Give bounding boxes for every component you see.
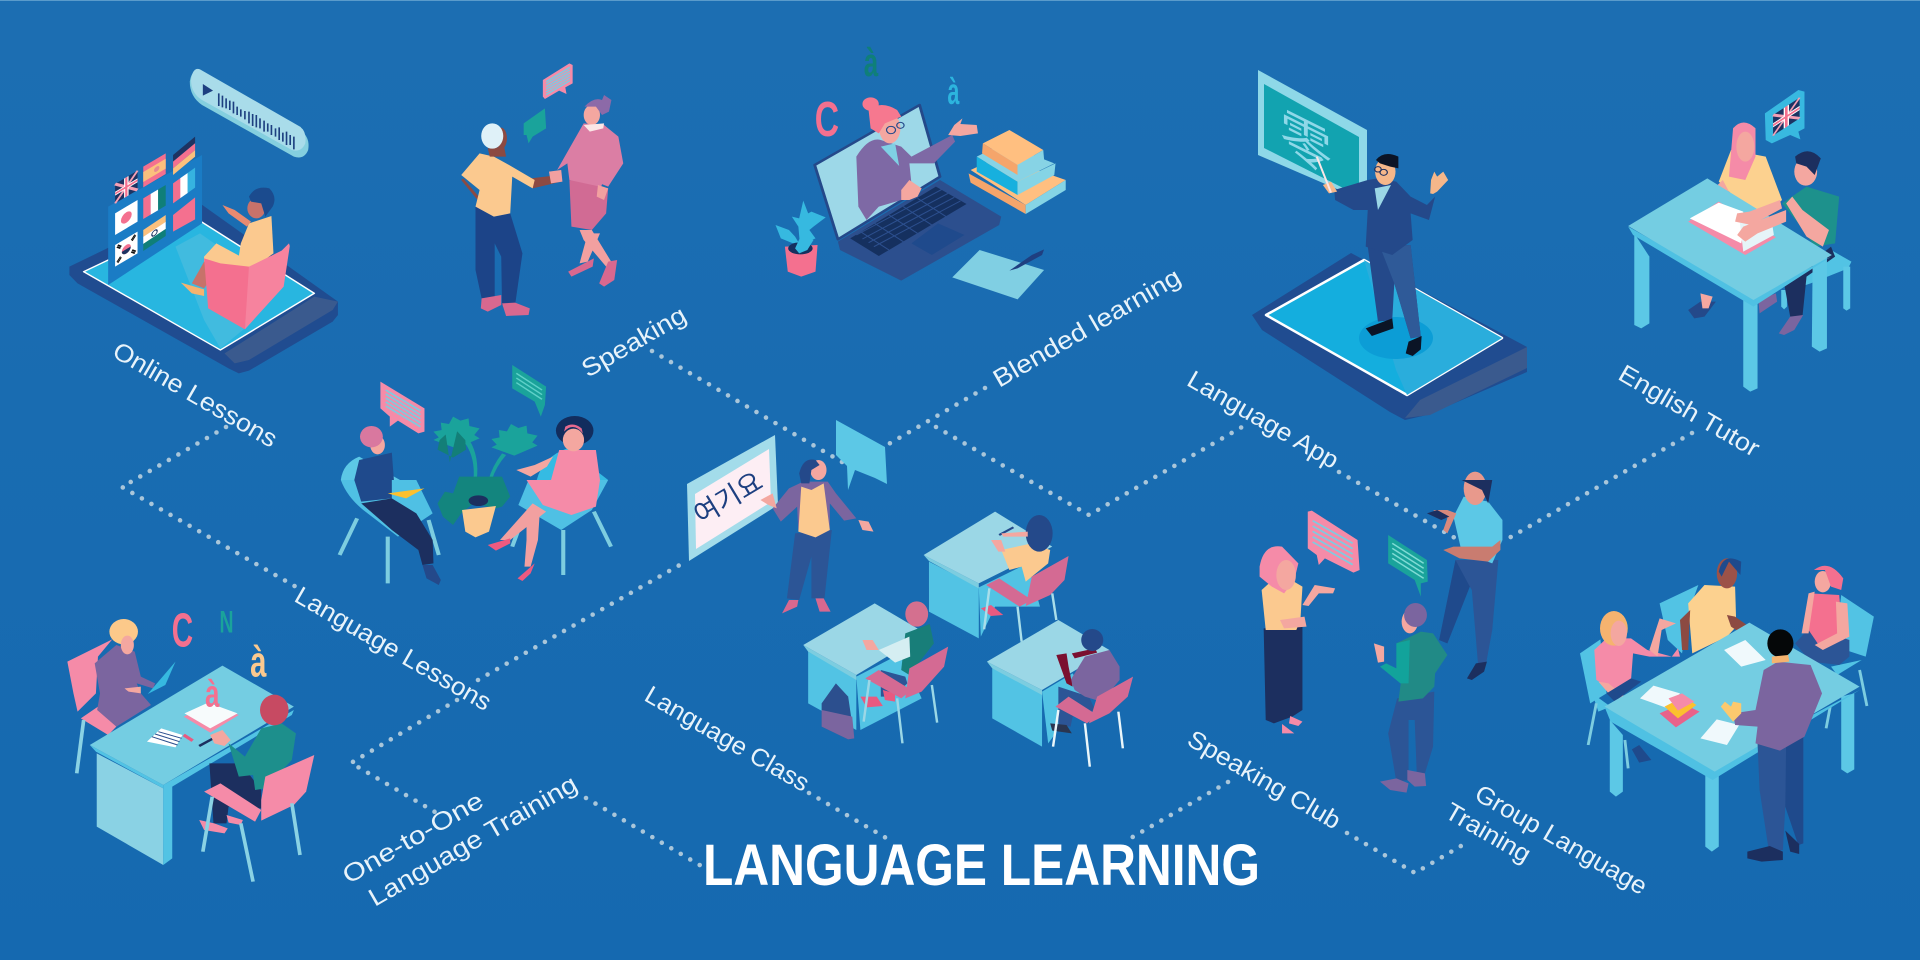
flag: Germany <box>173 137 195 175</box>
floating letters: C <box>172 604 193 658</box>
paper and pen <box>952 249 1044 299</box>
scene: language class <box>687 420 1133 767</box>
laptop <box>815 105 1001 281</box>
UK speech bubble <box>1765 90 1804 143</box>
scene: language app <box>1252 70 1527 420</box>
speech bubble: pink <box>1308 511 1360 573</box>
woman <box>1688 122 1782 318</box>
scene: english tutor <box>1628 90 1851 392</box>
label: Blended learning: Blended learning <box>988 263 1186 393</box>
desk right <box>987 620 1109 747</box>
floating letters: à <box>948 72 960 113</box>
dotted connector lines <box>122 351 1692 873</box>
language board: 여기요 <box>689 466 768 530</box>
language board <box>687 435 778 561</box>
student right <box>1050 629 1133 767</box>
woman <box>95 619 176 727</box>
woman yellow top <box>1680 558 1761 653</box>
teacher <box>760 459 873 613</box>
desk <box>90 666 294 865</box>
flag: India <box>143 215 166 251</box>
man <box>199 695 314 882</box>
floating letters: à <box>864 40 878 86</box>
phone body <box>69 203 338 373</box>
label: One-to-One: One-to-One <box>338 786 488 890</box>
floating letters: N <box>220 604 234 640</box>
teacher on screen <box>856 97 978 220</box>
left chair <box>67 639 116 773</box>
left chair <box>340 480 439 583</box>
label: English Tutor: English Tutor <box>1614 359 1764 463</box>
floating letters <box>815 40 960 146</box>
woman pink top <box>1594 611 1680 763</box>
seated person <box>354 480 441 585</box>
hands <box>1735 197 1829 247</box>
chair legs <box>1588 670 1867 768</box>
label: Language App: Language App <box>1182 365 1344 475</box>
flag: Spain <box>143 153 166 187</box>
student top right <box>981 515 1069 642</box>
man green sweater <box>1374 603 1447 793</box>
man <box>1758 151 1839 335</box>
flag: UK <box>115 171 138 203</box>
man purple sweater <box>1721 629 1822 862</box>
woman in armchair <box>181 188 290 329</box>
label: Training: Training <box>1440 797 1536 869</box>
keyboard <box>850 187 967 256</box>
floating letters: C <box>815 92 839 146</box>
scene: language lessons (upper) <box>341 365 608 480</box>
label: Speaking Club: Speaking Club <box>1183 725 1345 835</box>
woman salmon top <box>1795 566 1849 665</box>
flag panel <box>108 137 202 285</box>
speech bubble: teal <box>512 365 546 417</box>
label: Language Lessons: Language Lessons <box>290 581 496 717</box>
girl with phone <box>1427 472 1502 680</box>
flag: Korea <box>115 232 138 267</box>
label: Online Lessons: Online Lessons <box>108 337 282 453</box>
chalkboard: 零 <box>1280 101 1332 185</box>
potted plant <box>776 201 826 277</box>
scene: group language training <box>1580 558 1874 862</box>
scene: blended learning <box>776 40 1066 299</box>
potted plant <box>438 477 510 537</box>
woman <box>549 95 623 287</box>
flag: Japan <box>115 200 138 235</box>
papers <box>1640 640 1766 745</box>
desk top right <box>924 512 1052 638</box>
plant leaves upper <box>433 417 538 480</box>
floating letters: à <box>250 638 267 686</box>
flag: China <box>173 197 195 232</box>
man <box>461 123 561 316</box>
speech bubble: blue <box>836 420 887 490</box>
teacher <box>1317 154 1448 356</box>
sound bubble <box>190 69 309 157</box>
student left <box>860 601 948 743</box>
speech bubble: pink <box>380 382 424 433</box>
speech bubble: teal <box>524 108 546 143</box>
desk left <box>803 603 926 730</box>
stool <box>1781 250 1851 311</box>
scene: online lessons <box>69 69 338 373</box>
phone base <box>1252 253 1527 420</box>
chairs <box>1580 585 1874 712</box>
table <box>1628 178 1832 392</box>
scene: speaking club <box>1260 472 1502 793</box>
flag: Italy <box>143 185 166 219</box>
left chair and person top <box>341 426 400 480</box>
book stack <box>969 130 1066 214</box>
label: Language Class: Language Class <box>640 681 814 797</box>
scene: one-to-one language training <box>67 604 314 882</box>
table <box>1604 623 1860 852</box>
open book <box>1688 202 1776 255</box>
speech bubble: pink <box>543 63 573 99</box>
floating letters: à <box>205 671 220 715</box>
flag: France <box>173 168 195 203</box>
right chair and person <box>488 480 611 581</box>
floating letters <box>172 604 267 715</box>
label: Language Training: Language Training <box>364 770 582 912</box>
chalkboard <box>1258 70 1367 202</box>
label: Speaking: Speaking <box>577 301 691 383</box>
book pile <box>1660 693 1700 727</box>
woman left <box>1260 546 1335 733</box>
desk items <box>147 703 239 747</box>
speech bubble: teal <box>1388 535 1428 597</box>
title: LANGUAGE LEARNING <box>703 833 1260 898</box>
backpack <box>822 683 854 739</box>
right person top <box>516 416 608 480</box>
scene: language lessons (lower) <box>340 477 611 585</box>
scene: speaking <box>461 63 623 316</box>
label: Group Language: Group Language <box>1470 779 1652 901</box>
